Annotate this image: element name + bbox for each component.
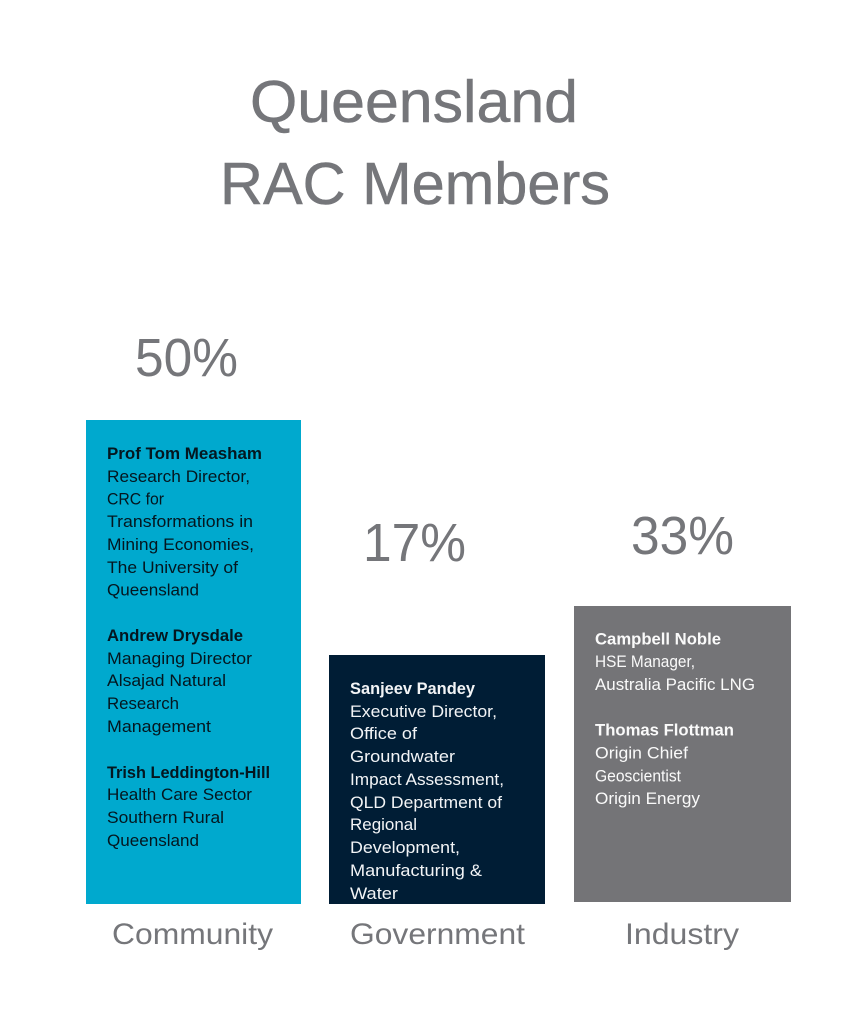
member text: industry: Origin Chief — [595, 744, 688, 762]
member text: government: QLD Department of — [350, 793, 502, 812]
member text: government: Water — [350, 884, 398, 903]
member text: industry: Australia Pacific LNG — [595, 675, 755, 694]
panel: government bar — [329, 655, 545, 904]
member text: community: Health Care Sector — [107, 785, 252, 804]
member text: industry: Origin Energy — [595, 789, 701, 808]
member text: community — [107, 444, 270, 850]
member text: government: Regional — [350, 815, 417, 834]
member text: community: Research Director, — [107, 467, 250, 486]
member text: community: CRC for — [107, 490, 164, 508]
member text: government: Manufacturing & — [350, 861, 483, 880]
label: industry: Industry — [625, 918, 739, 951]
member text: government: Sanjeev Pandey — [350, 679, 476, 698]
member text: government: Executive Director, — [350, 702, 497, 721]
member text: industry: Geoscientist — [595, 766, 681, 786]
member text: industry: HSE Manager, — [595, 652, 695, 671]
panel: community bar — [86, 420, 301, 904]
title: Queensland — [250, 69, 578, 135]
member text: community: Research — [107, 694, 179, 713]
member text: government: Groundwater — [350, 747, 455, 766]
member text: industry — [595, 630, 755, 808]
member text: industry: Campbell Noble — [595, 630, 721, 648]
member text: government: Office of — [350, 724, 417, 743]
percentage: industry 33%: 33% — [631, 506, 734, 566]
member text: community: Queensland — [107, 580, 199, 600]
title — [220, 69, 610, 217]
member text: community: Mining Economies, — [107, 535, 254, 554]
percentage: community 50%: 50% — [135, 328, 238, 388]
title: RAC Members — [220, 151, 610, 217]
label: community: Community — [112, 918, 273, 951]
member text: government: Development, — [350, 838, 460, 857]
percentage: government 17%: 17% — [363, 513, 466, 573]
member text: industry: Thomas Flottman — [595, 720, 734, 740]
member text: community: Alsajad Natural — [107, 671, 226, 690]
member text: community: The University of — [107, 558, 238, 577]
label: government: Government — [350, 918, 526, 951]
panel: industry bar — [574, 606, 791, 902]
member text: community: Managing Director — [107, 649, 252, 668]
member text: government: Impact Assessment, — [350, 770, 504, 789]
member text: community: Trish Leddington-Hill — [107, 763, 270, 782]
member text: community: Southern Rural — [107, 808, 224, 827]
member text: community: Management — [107, 717, 211, 736]
member text: community: Andrew Drysdale — [107, 626, 243, 645]
member text: community: Transformations in — [107, 512, 253, 531]
member text: government — [350, 679, 504, 903]
member text: community: Prof Tom Measham — [107, 444, 262, 463]
member text: community: Queensland — [107, 831, 199, 850]
